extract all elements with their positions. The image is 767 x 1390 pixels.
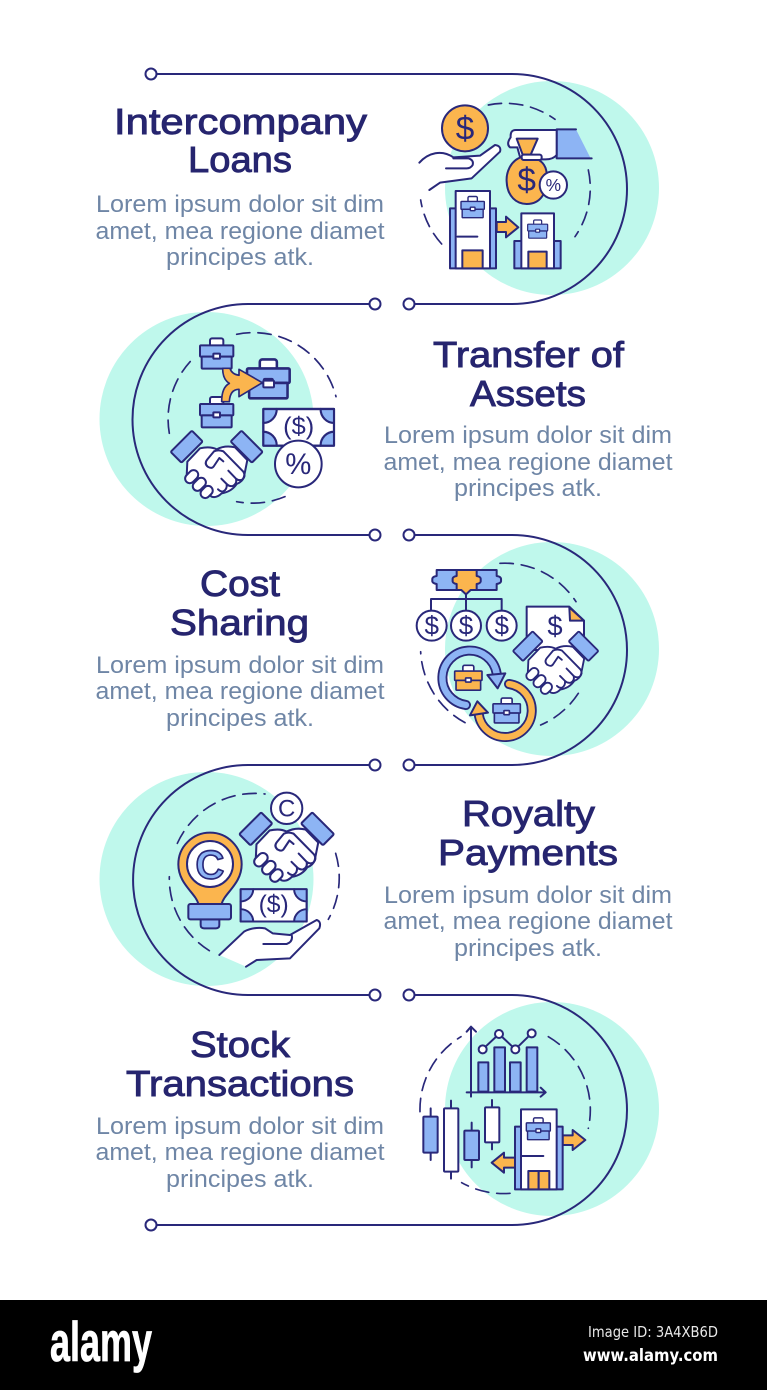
heading: Stock bbox=[190, 1024, 291, 1065]
body text: principes atk. bbox=[166, 244, 314, 271]
teal circle backdrop bbox=[445, 81, 659, 295]
heading: Loans bbox=[188, 139, 292, 180]
icon: shared cost puzzle and cycle: $ bbox=[459, 610, 474, 640]
heading: Payments bbox=[438, 832, 618, 873]
body text: amet, mea regione diamet bbox=[96, 218, 385, 245]
body text bbox=[96, 1113, 385, 1193]
icon: loan money and buildings: $ bbox=[517, 162, 536, 199]
heading: Transfer of bbox=[433, 334, 625, 375]
heading: Sharing bbox=[170, 602, 309, 643]
icon: loan money and buildings: % bbox=[546, 175, 561, 195]
panel: transfer of assets bbox=[100, 298, 673, 540]
body text: Lorem ipsum dolor sit dim bbox=[384, 422, 672, 449]
body text: Lorem ipsum dolor sit dim bbox=[384, 882, 672, 909]
body text bbox=[96, 652, 385, 732]
teal circle backdrop bbox=[445, 1002, 659, 1216]
teal circle backdrop bbox=[100, 772, 314, 986]
icon: briefcases merging and handshake: ($) bbox=[283, 413, 314, 441]
body text: principes atk. bbox=[454, 935, 602, 962]
connector line bbox=[404, 530, 627, 770]
teal circle backdrop bbox=[445, 542, 659, 756]
icon: loan money and buildings bbox=[419, 103, 592, 268]
image id: Image ID: 3A4XB6D bbox=[588, 1323, 718, 1341]
body text bbox=[96, 191, 385, 271]
body text: amet, mea regione diamet bbox=[384, 449, 673, 476]
heading bbox=[438, 793, 618, 873]
body text: Lorem ipsum dolor sit dim bbox=[96, 191, 384, 218]
icon: copyright bulb and payment bbox=[169, 793, 339, 967]
body text: Lorem ipsum dolor sit dim bbox=[96, 652, 384, 679]
icon: shared cost puzzle and cycle: $ bbox=[494, 610, 509, 640]
connector line bbox=[146, 68, 627, 310]
icon: stock charts and building bbox=[420, 1027, 590, 1194]
heading: Cost bbox=[200, 563, 280, 604]
heading bbox=[114, 101, 367, 180]
website: www.alamy.com bbox=[583, 1346, 718, 1366]
watermark footer bar bbox=[0, 1300, 767, 1390]
body text: principes atk. bbox=[166, 705, 314, 732]
body text bbox=[384, 882, 673, 962]
body text: amet, mea regione diamet bbox=[96, 1139, 385, 1166]
icon: copyright bulb and payment: C bbox=[278, 796, 295, 823]
connector line bbox=[132, 298, 380, 540]
body text: principes atk. bbox=[166, 1166, 314, 1193]
icon: copyright bulb and payment: ($) bbox=[259, 892, 289, 919]
heading bbox=[126, 1024, 354, 1104]
icon: loan money and buildings: $ bbox=[456, 110, 474, 147]
panel: stock transactions bbox=[96, 990, 659, 1230]
panel: royalty payments bbox=[100, 760, 673, 1000]
heading bbox=[170, 563, 309, 643]
heading bbox=[433, 334, 625, 414]
heading: Transactions bbox=[126, 1063, 354, 1104]
connector line bbox=[133, 760, 380, 1000]
heading: Assets bbox=[470, 373, 586, 414]
body text: amet, mea regione diamet bbox=[96, 678, 385, 705]
icon: briefcases merging and handshake bbox=[168, 333, 336, 503]
icon: shared cost puzzle and cycle: $ bbox=[547, 611, 563, 642]
connector line bbox=[146, 990, 627, 1230]
panel: intercompany loans bbox=[96, 68, 659, 310]
icon: briefcases merging and handshake: % bbox=[285, 448, 311, 481]
body text: amet, mea regione diamet bbox=[384, 908, 673, 935]
teal circle backdrop bbox=[100, 312, 314, 526]
alamy logo: alamy bbox=[50, 1310, 152, 1373]
body text: Lorem ipsum dolor sit dim bbox=[96, 1113, 384, 1140]
heading: Royalty bbox=[462, 793, 595, 834]
icon: copyright bulb and payment: C bbox=[196, 843, 224, 887]
body text bbox=[384, 422, 673, 502]
body text: principes atk. bbox=[454, 475, 602, 502]
icon: shared cost puzzle and cycle bbox=[417, 563, 598, 737]
panel: cost sharing bbox=[96, 530, 659, 770]
heading: Intercompany bbox=[114, 101, 367, 142]
icon: shared cost puzzle and cycle: $ bbox=[424, 610, 439, 640]
